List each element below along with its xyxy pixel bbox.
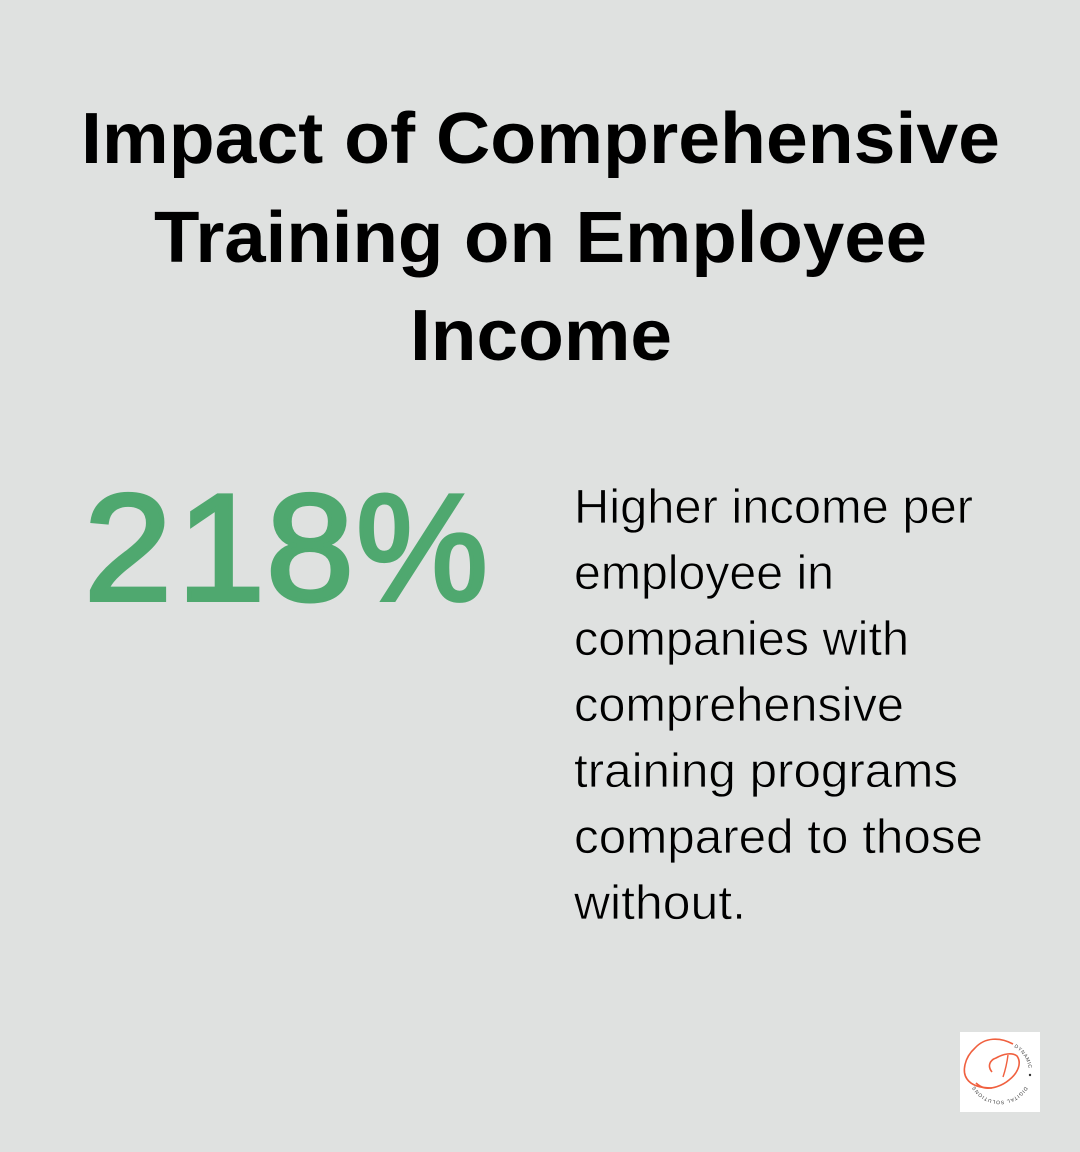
description text: compared to those — [574, 811, 983, 864]
description text: employee in — [574, 547, 834, 600]
logo: Dynamic Digital Solutions: DYNAMIC — [1014, 1044, 1032, 1068]
logo: Dynamic Digital Solutions — [960, 1032, 1040, 1112]
description text: training programs — [574, 745, 958, 798]
description text: comprehensive — [574, 679, 904, 732]
statistic: 218%: 8 — [266, 463, 354, 633]
statistic: 218%: 2 — [84, 463, 172, 633]
title: Income — [410, 296, 672, 376]
title: Impact of Comprehensive — [81, 99, 1000, 179]
description text: without. — [573, 877, 746, 930]
statistic: 218% — [84, 463, 488, 633]
statistic: 218%: 1 — [177, 463, 265, 633]
statistic: 218%: % — [356, 463, 488, 633]
logo: Dynamic Digital Solutions: DIGITAL SOLUTIONS — [972, 1086, 1028, 1104]
description text: companies with — [574, 613, 909, 666]
title: Training on Employee — [154, 198, 927, 278]
title — [81, 99, 1000, 376]
description text — [573, 481, 983, 930]
description text: Higher income per — [574, 481, 973, 534]
